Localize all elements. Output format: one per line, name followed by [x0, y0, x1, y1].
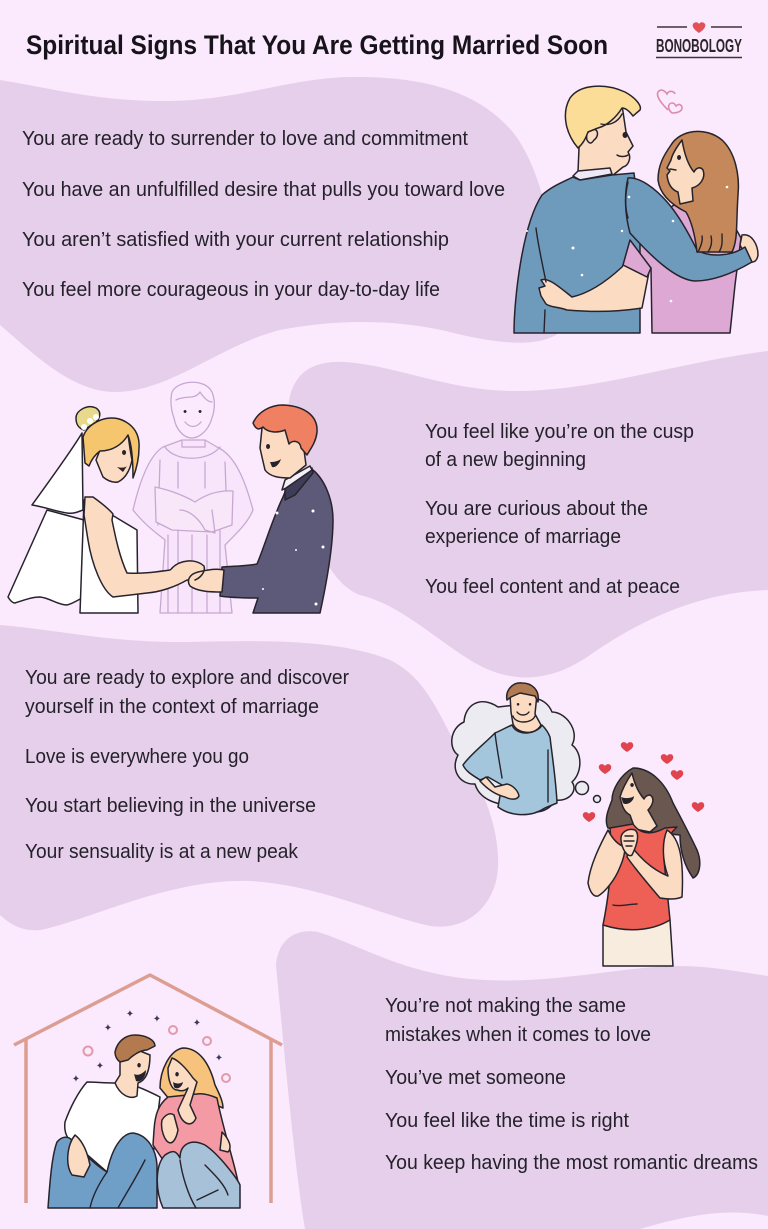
bride's upper veil — [32, 433, 83, 513]
woman's sweater — [153, 1094, 238, 1182]
man's jeans — [48, 1133, 157, 1208]
sparkles: ✦ — [96, 1061, 104, 1072]
text block: panel 4 signs: You’ve met someone — [385, 1066, 566, 1089]
bride's dress — [80, 500, 138, 613]
text block: panel 1 signs: You have an unfulfilled desire that pulls you toward love — [22, 178, 505, 201]
woman's eye and smile — [621, 783, 634, 804]
blob: panel 1 background — [0, 77, 562, 392]
text block: panel 4 signs: mistakes when it comes to love — [385, 1023, 651, 1046]
text block: panel 1 signs — [22, 127, 505, 301]
text block: panel 2 signs: You are curious about the — [425, 497, 648, 520]
man's sweater — [463, 725, 557, 815]
sparkles: ✦ — [126, 1009, 134, 1020]
woman's pants — [603, 920, 673, 966]
man's arm — [626, 178, 752, 281]
text block: panel 4 signs: You’re not making the same — [385, 994, 626, 1017]
sparkles — [262, 510, 324, 606]
text block: panel 3 signs: Your sensuality is at a new peak — [25, 840, 299, 863]
woman's face — [168, 1058, 197, 1124]
bride's eye and smile — [117, 450, 127, 472]
man's hair — [115, 1035, 155, 1062]
text block: panel 1 signs: You feel more courageous in your day-to-day life — [22, 278, 440, 301]
bride's hair bun — [76, 407, 100, 430]
man's torso — [514, 173, 640, 333]
sparkles: ✦ — [193, 1018, 201, 1029]
illustration: woman dreaming of partner — [452, 683, 704, 966]
illustration: wedding ceremony — [8, 382, 333, 613]
sparkles — [72, 1009, 223, 1085]
groom's eye and smile — [266, 444, 281, 467]
woman's clasped hands — [621, 829, 638, 856]
woman's jeans — [157, 1142, 240, 1208]
text block: panel 4 signs: You feel like the time is right — [385, 1109, 629, 1132]
text block: panel 4 signs: You keep having the most romantic dreams — [385, 1151, 758, 1174]
man's collar — [573, 168, 612, 180]
illustration: couple in a house — [14, 975, 282, 1208]
man's back seam — [536, 182, 628, 333]
priest (faint outline) — [133, 382, 253, 613]
man's sweater — [65, 1082, 160, 1172]
man's beard and eyes — [513, 712, 535, 722]
bride's face — [96, 434, 132, 482]
hair strands — [698, 234, 722, 252]
faces — [134, 1063, 183, 1088]
text block: panel 3 signs: Love is everywhere you go — [25, 745, 249, 768]
logo: Bonobology — [656, 22, 742, 58]
bride's flowers — [81, 414, 99, 430]
text block: panel 3 signs: You start believing in the universe — [25, 794, 316, 817]
groom's shirt collar — [282, 466, 312, 490]
text block: panel 2 signs: experience of marriage — [425, 525, 621, 548]
man's hand on woman — [220, 1132, 230, 1152]
man's jeans line — [90, 1160, 145, 1208]
groom's hair — [253, 405, 317, 455]
bride's lower veil — [8, 510, 84, 605]
woman's left arm — [588, 830, 625, 896]
blob: panel 3 background — [0, 625, 498, 930]
woman's face and neck — [620, 773, 657, 832]
man's hair — [565, 86, 640, 148]
text block: panel 3 signs — [25, 666, 349, 863]
man's hand on hip — [480, 777, 519, 799]
text block: panel 1 signs: You aren’t satisfied with your current relationship — [22, 228, 449, 251]
text block: panel 3 signs: You are ready to explore and discover — [25, 666, 349, 689]
woman's red top — [603, 824, 677, 930]
icon: floating hearts — [583, 742, 704, 822]
bride's hair — [83, 418, 139, 478]
text block: panel 1 signs: You are ready to surrender to love and commitment — [22, 127, 468, 150]
woman's hand on sweater — [162, 1114, 178, 1143]
blob: panel 2 background — [288, 351, 768, 677]
facial features — [623, 132, 681, 160]
pink flowers — [84, 1026, 230, 1082]
text block: panel 2 signs: You feel like you’re on the cusp — [425, 420, 694, 443]
text block: panel 2 signs — [425, 420, 694, 598]
man's head — [510, 691, 541, 732]
man's neck and face — [578, 104, 633, 176]
man's eyes — [517, 703, 531, 706]
sparkles: ✦ — [153, 1014, 161, 1025]
groom's suit — [220, 470, 333, 613]
blob: panel 4 background — [276, 931, 768, 1229]
woman's far hand — [740, 235, 758, 262]
man's hand — [68, 1135, 90, 1177]
house outline — [14, 975, 282, 1203]
woman's body — [628, 203, 741, 333]
woman's right arm — [627, 830, 682, 899]
woman's finger lines — [613, 836, 637, 906]
text block: panel 3 signs: yourself in the context of marriage — [25, 695, 319, 718]
smiles and lines — [601, 114, 676, 170]
title: Spiritual Signs That You Are Getting Married Soon — [26, 30, 608, 60]
text block: panel 2 signs: of a new beginning — [425, 448, 586, 471]
sparkles: ✦ — [104, 1023, 112, 1034]
clasped hands — [172, 561, 224, 592]
groom's lapel and collar — [285, 468, 313, 500]
woman's jeans lines — [180, 1160, 228, 1208]
icon: floating hearts — [657, 90, 682, 113]
thought bubbles — [576, 782, 600, 802]
thought cloud — [452, 698, 580, 812]
woman's face — [667, 140, 704, 204]
text block: panel 4 signs — [385, 994, 758, 1174]
woman's hair back — [606, 768, 700, 878]
woman's hair — [160, 1048, 223, 1108]
illustration: couple embracing — [514, 86, 758, 333]
man's neck and head — [115, 1045, 150, 1097]
woman's hair — [658, 131, 738, 252]
man's hair — [507, 683, 538, 702]
bride's skin: body and arm — [84, 497, 204, 597]
groom's face and neck — [260, 410, 310, 478]
sparkles: ✦ — [215, 1053, 223, 1064]
sparkles — [526, 186, 728, 302]
woman's arm sleeve — [623, 240, 651, 277]
man's sweater inner arm line — [495, 733, 548, 802]
text block: panel 2 signs: You feel content and at peace — [425, 575, 680, 598]
woman's arm around man — [539, 257, 650, 311]
sparkles: ✦ — [72, 1074, 80, 1085]
icon: logo heart — [693, 22, 705, 33]
man's ear — [587, 129, 597, 143]
